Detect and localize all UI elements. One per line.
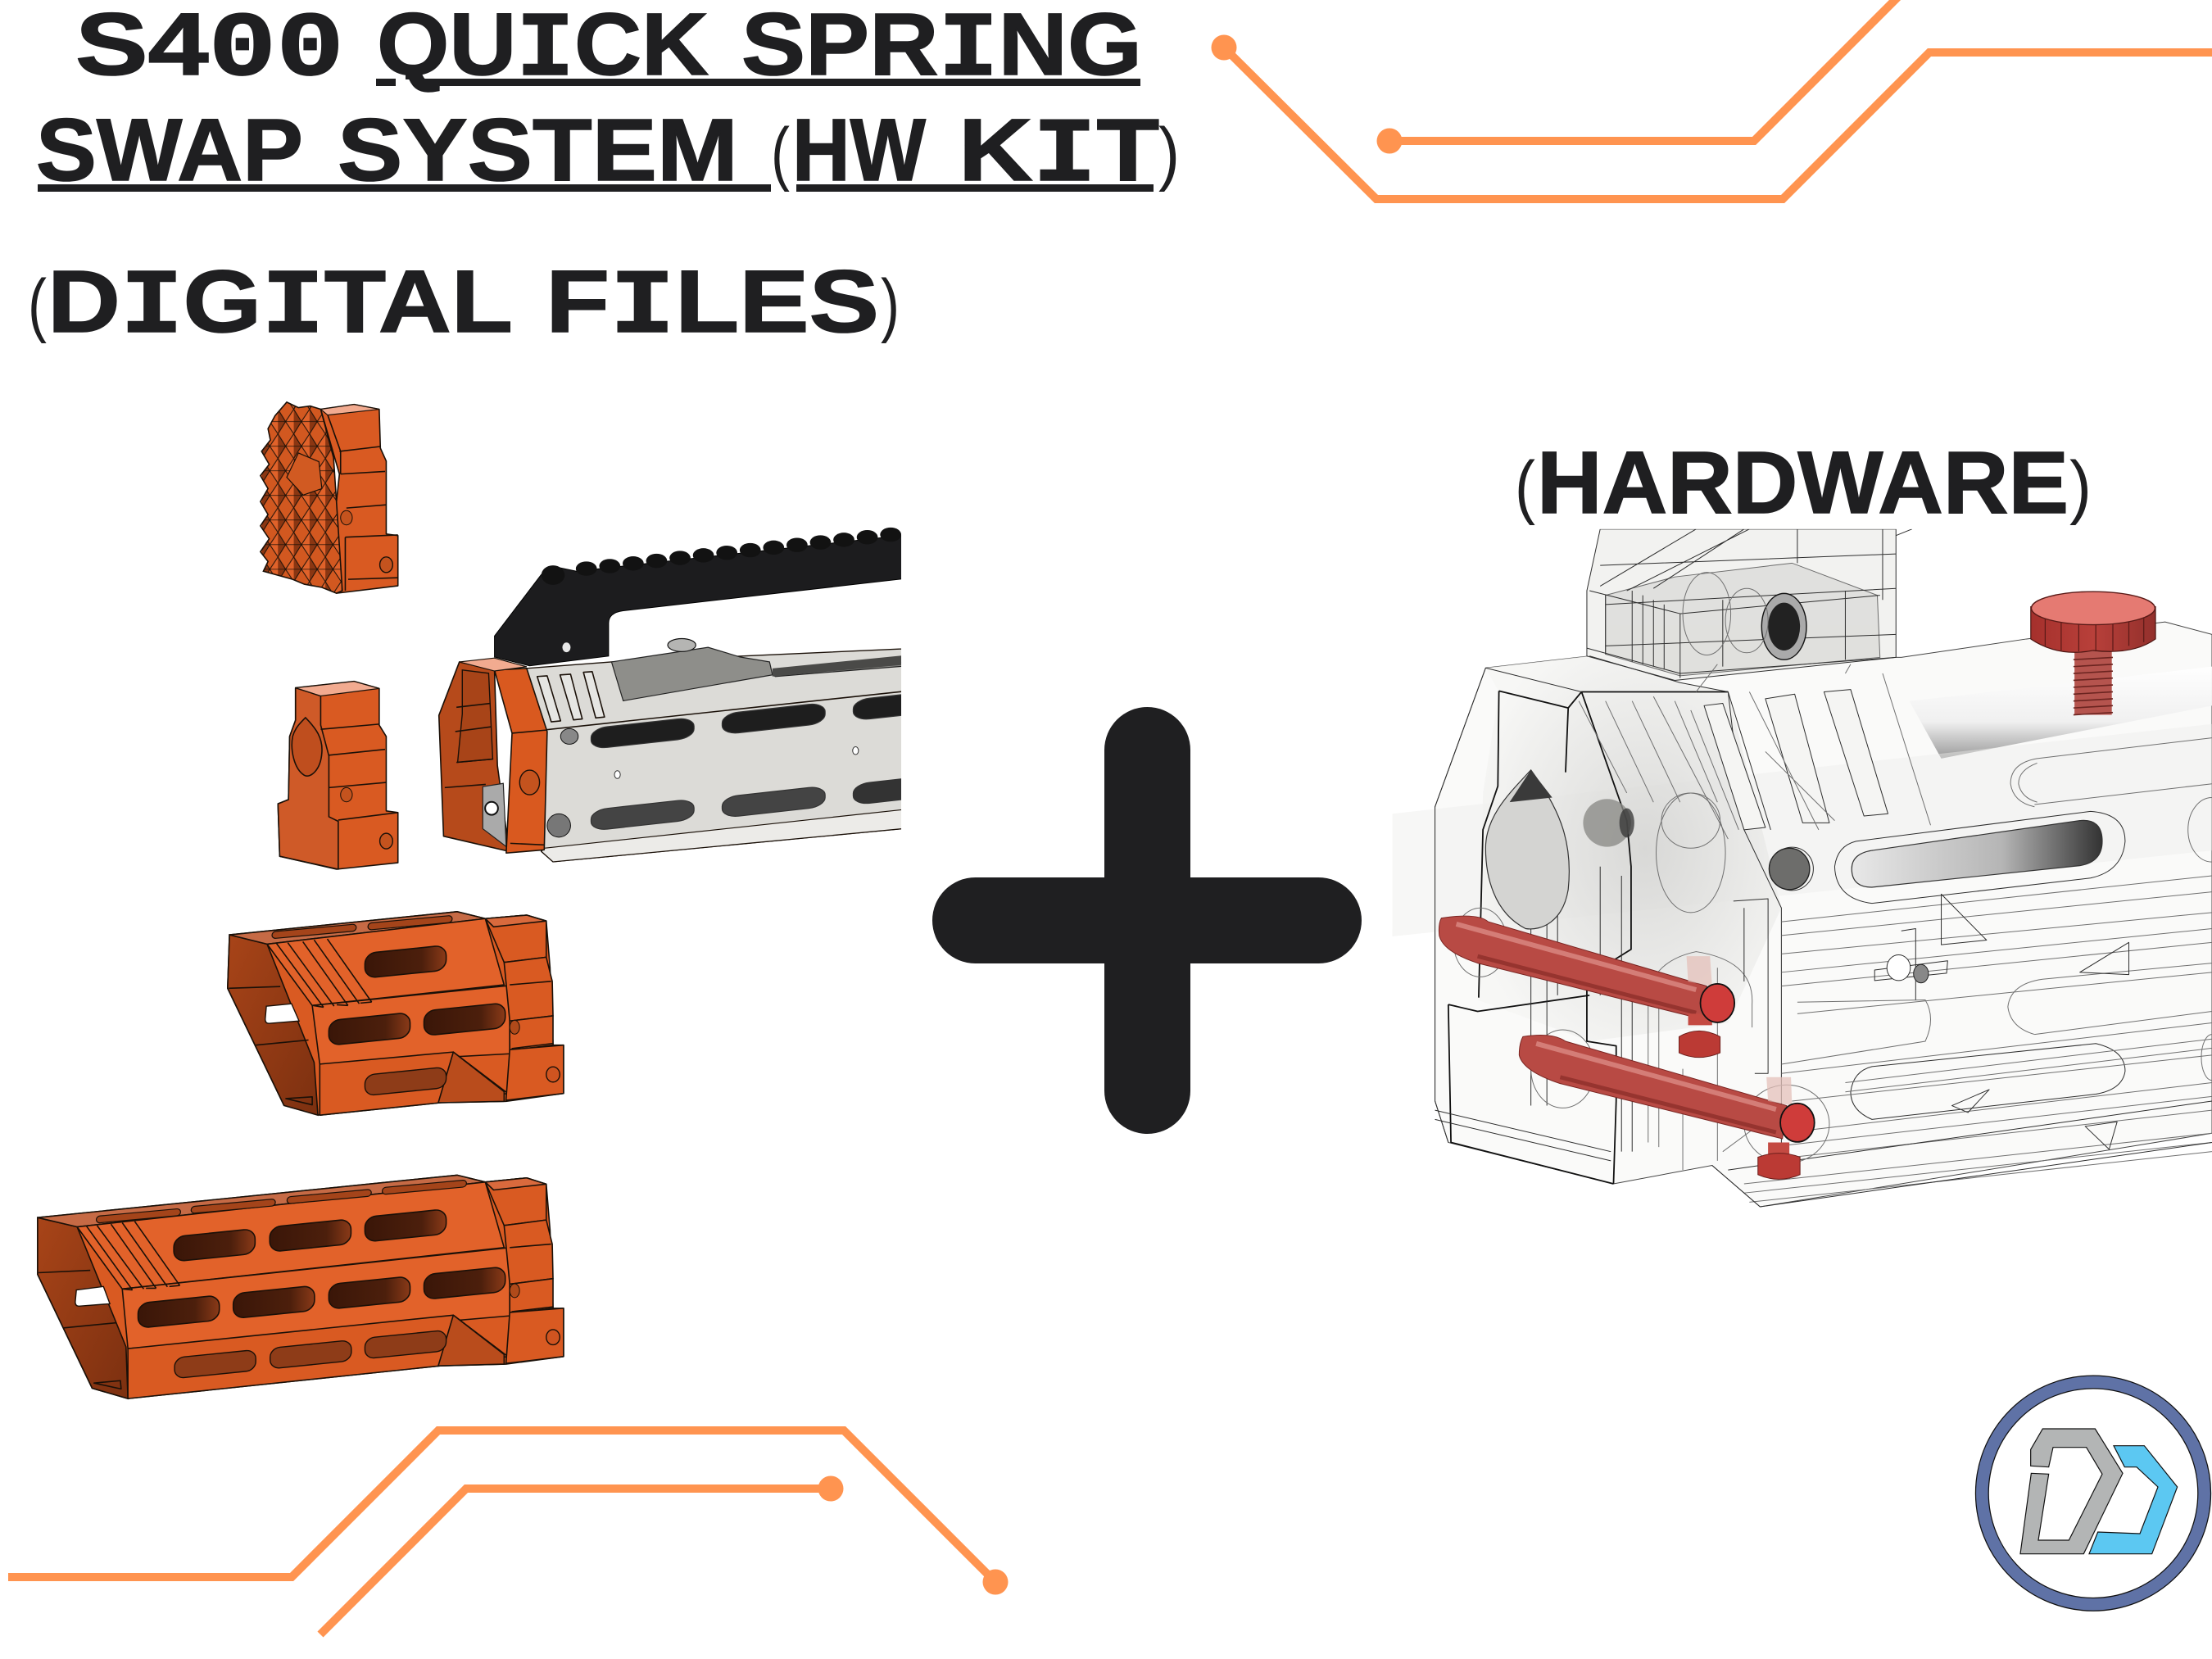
knob and screw [2031,592,2155,715]
part: long handguard [38,1175,564,1398]
title line 2 [36,100,1180,208]
title line 2: SWAP [36,100,303,199]
orange end cap [439,662,509,851]
screws and small details [1783,847,1814,891]
heading: hardware: HARDWARE [1537,433,2069,532]
rod 1 [1439,916,1734,1058]
side slots [591,689,956,831]
plus sign [932,707,1362,1134]
hardware: translucent assembly with red parts [1393,529,2212,1207]
logo gray D [2020,1429,2123,1554]
receiver body [527,647,936,862]
slots [138,1209,505,1328]
title line 2: ) [1158,114,1180,193]
heading: digital files: DIGITAL [48,252,513,360]
grip ribs [87,1222,179,1290]
ghost counterbores [1648,952,1760,1170]
rear sight block [611,647,936,700]
title line 2: HW [792,100,926,199]
heading: digital files: FILES [546,252,879,360]
part: assembled carbine with end cap and handle [437,528,901,863]
vents [1704,690,1888,830]
main slot [1852,820,2102,887]
part: textured end cap [261,402,398,593]
logo [1982,1382,2205,1604]
dark outlines of end cap [1448,691,1728,1184]
carry handle [495,532,936,666]
title line 2: KIT [959,100,1159,208]
circuit lines bottom left [8,1430,1008,1634]
long ghost lines [1744,876,2212,1202]
ghost slots [2010,738,2212,807]
part: plain end cap [278,682,398,869]
teardrop bore [1485,770,1569,929]
heading: digital files [28,252,900,360]
circuit lines top right [1211,0,2212,199]
vent slots [537,672,605,722]
title line 2: ( [771,114,790,193]
heading: hardware: ( [1515,447,1535,526]
logo ring [1982,1382,2205,1604]
title line 1 [75,0,1142,102]
title line 2: SYSTEM [338,100,738,199]
part: short handguard [228,912,564,1115]
rail teeth [542,528,901,585]
heading: digital files: ( [28,265,47,344]
ghost body [1435,622,2212,1207]
logo blue D [2089,1446,2178,1554]
title [36,0,1180,208]
heading: hardware: ) [2069,447,2092,526]
top block [1587,529,1896,680]
rod 2 [1519,1036,1815,1179]
slots [329,945,505,1045]
heading: digital files: ) [881,265,900,344]
grip ribs [277,939,372,1007]
